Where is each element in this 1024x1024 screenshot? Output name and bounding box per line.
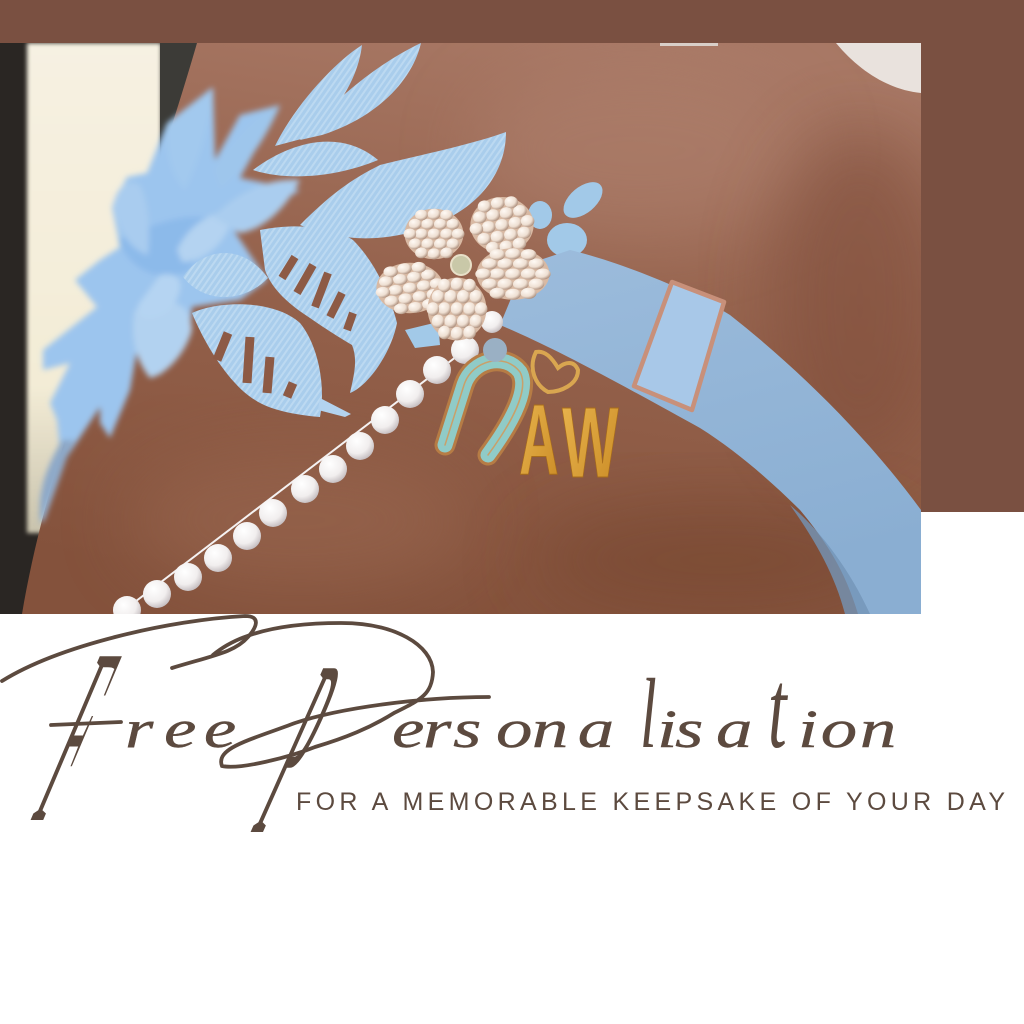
photo: garter on thigh [0,43,950,624]
top-right white lace [836,43,921,93]
subtitle: FOR A MEMORABLE KEEPSAKE OF YOUR DAY [296,788,1005,816]
pearl flower brooch [369,192,551,340]
ersona letters: n [532,699,568,759]
leaf: top long [300,43,421,140]
clasp ring [533,352,578,392]
lace leaves [183,43,506,417]
ion letters: n [860,699,896,759]
ersona letters: a [578,699,614,759]
leaf: big upper [300,132,506,238]
horseshoe charm [445,338,523,455]
gold initials charm: W [562,387,619,499]
brooch centre gem [451,255,471,275]
gold initials charm: A [519,385,559,496]
brown backdrop panel [0,0,1024,512]
script heading: Free Personalisation [2,599,896,887]
ion letters: o [821,699,857,759]
ree letters: e [204,699,236,759]
F stem letter: F [6,599,148,875]
P stem letter: P [225,610,373,887]
window background [0,43,197,614]
gold initials charm [520,350,619,478]
small lace buds [405,175,609,348]
ersona letters: e [392,699,424,759]
flower base mass [40,87,300,523]
F and P swash flourishes [2,616,489,767]
ersona letters: r [423,699,453,759]
buckle [634,282,724,410]
leaf: right with openwork [260,226,397,393]
leaf: lower with openwork [192,304,351,417]
pearl strand [113,311,503,624]
isa letters: i [657,699,677,759]
skin [22,43,921,614]
ersona letters: o [496,699,532,759]
ree letters: r [125,699,155,759]
blurred lace flower [40,87,300,525]
top lace fragment [660,43,718,46]
letter l: l [640,658,657,769]
satin belt [500,250,921,614]
ion letters: i [798,699,818,759]
isa letters: s [675,699,703,759]
leaf: top narrow [275,45,362,146]
isa letters: a [716,699,752,759]
leaf: small center [183,253,268,297]
ree letters: e [164,699,196,759]
leaf: mid [253,142,378,176]
letter t: t [768,648,788,771]
ersona letters: s [453,699,481,759]
skin light and shade [130,60,950,620]
